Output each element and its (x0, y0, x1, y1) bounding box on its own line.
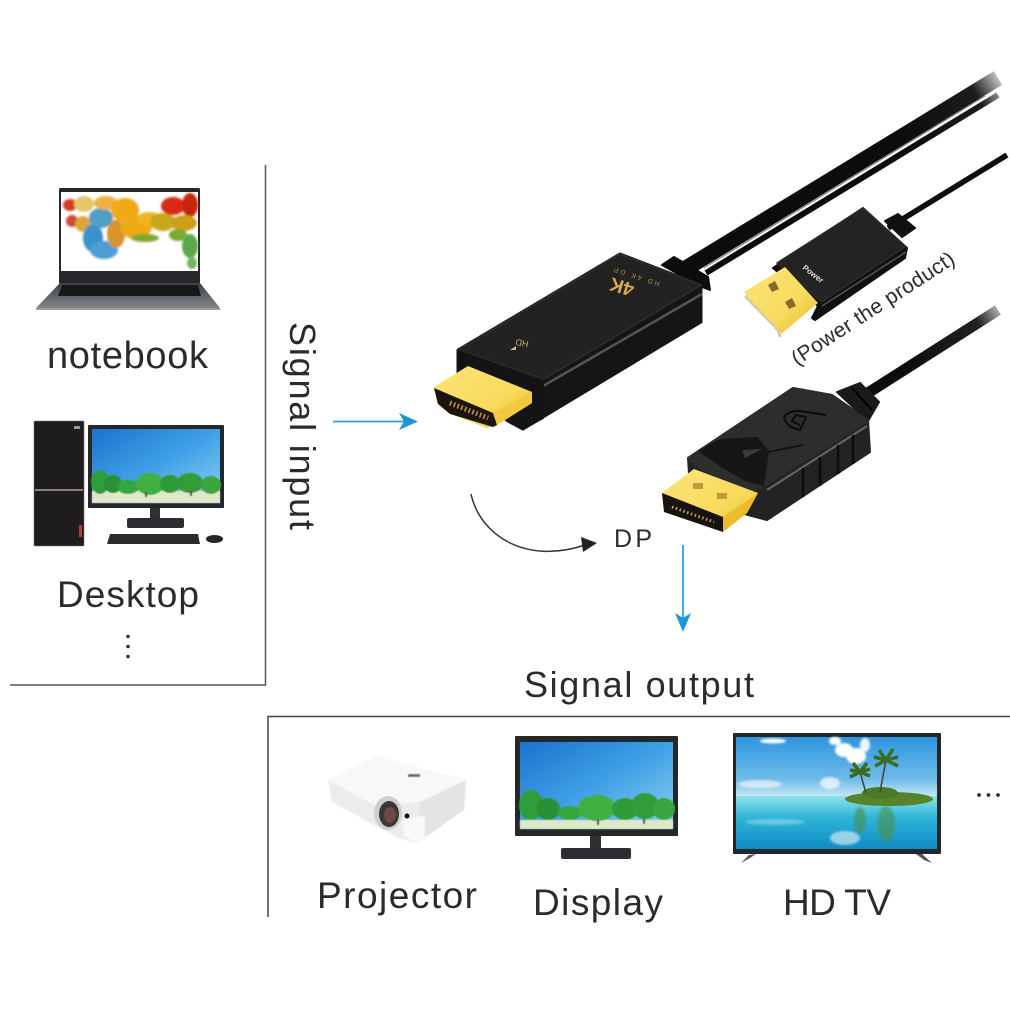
icon: vertical ellipsis (126, 635, 130, 658)
DP latch (700, 438, 768, 485)
artwork: colour splash on laptop screen (63, 193, 198, 269)
caption: Power the product: (Power the product) (787, 247, 959, 370)
cable: USB power cable (885, 155, 1007, 237)
cable: main HDMI cable pair (662, 78, 998, 290)
label: Signal input: Signal input (282, 322, 323, 530)
icon: display monitor (515, 736, 678, 859)
projector lens (374, 796, 410, 830)
panel: input frame lines (10, 165, 266, 685)
TV scene: clouds (738, 737, 870, 845)
label: Signal output: Signal output (524, 664, 754, 705)
label: Desktop: Desktop (57, 574, 199, 615)
arrow: signal input (333, 413, 418, 430)
TV scene: island and palms (845, 749, 933, 842)
product label: HD: HD (514, 337, 529, 349)
connector: USB power plug (744, 208, 907, 337)
panel: output frame lines (268, 716, 1010, 917)
DisplayPort gold plug (662, 469, 758, 532)
arrow: curved HDMI to DP (471, 494, 597, 552)
USB gold plug (744, 267, 818, 337)
arrow: signal output (675, 545, 691, 632)
label: Projector: Projector (317, 875, 477, 916)
laptop base (36, 283, 220, 308)
desktop monitor (88, 425, 224, 528)
icon: horizontal ellipsis (977, 793, 1000, 797)
icon: notebook laptop (36, 188, 220, 310)
D logo on housing (784, 411, 826, 430)
label: DP: DP (614, 525, 652, 553)
desktop tower (34, 421, 84, 546)
icon: HD TV (733, 733, 941, 863)
product label: HD 4K DP: HD 4K DP (613, 265, 661, 287)
cable: DisplayPort cable (837, 310, 998, 421)
HDMI gold plug (434, 366, 532, 428)
connector: DisplayPort housing (662, 388, 870, 532)
label: HD TV: HD TV (783, 882, 891, 923)
HDMI small triangle (510, 346, 516, 350)
product label: Power: Power (801, 263, 825, 285)
icon: projector (328, 756, 466, 843)
label: Display: Display (533, 882, 664, 923)
label: notebook: notebook (47, 335, 209, 377)
product label: 4K: 4K (607, 272, 637, 300)
icon: desktop computer (34, 421, 224, 546)
connector: HDMI housing (434, 254, 702, 429)
desktop keyboard and mouse (107, 534, 223, 544)
